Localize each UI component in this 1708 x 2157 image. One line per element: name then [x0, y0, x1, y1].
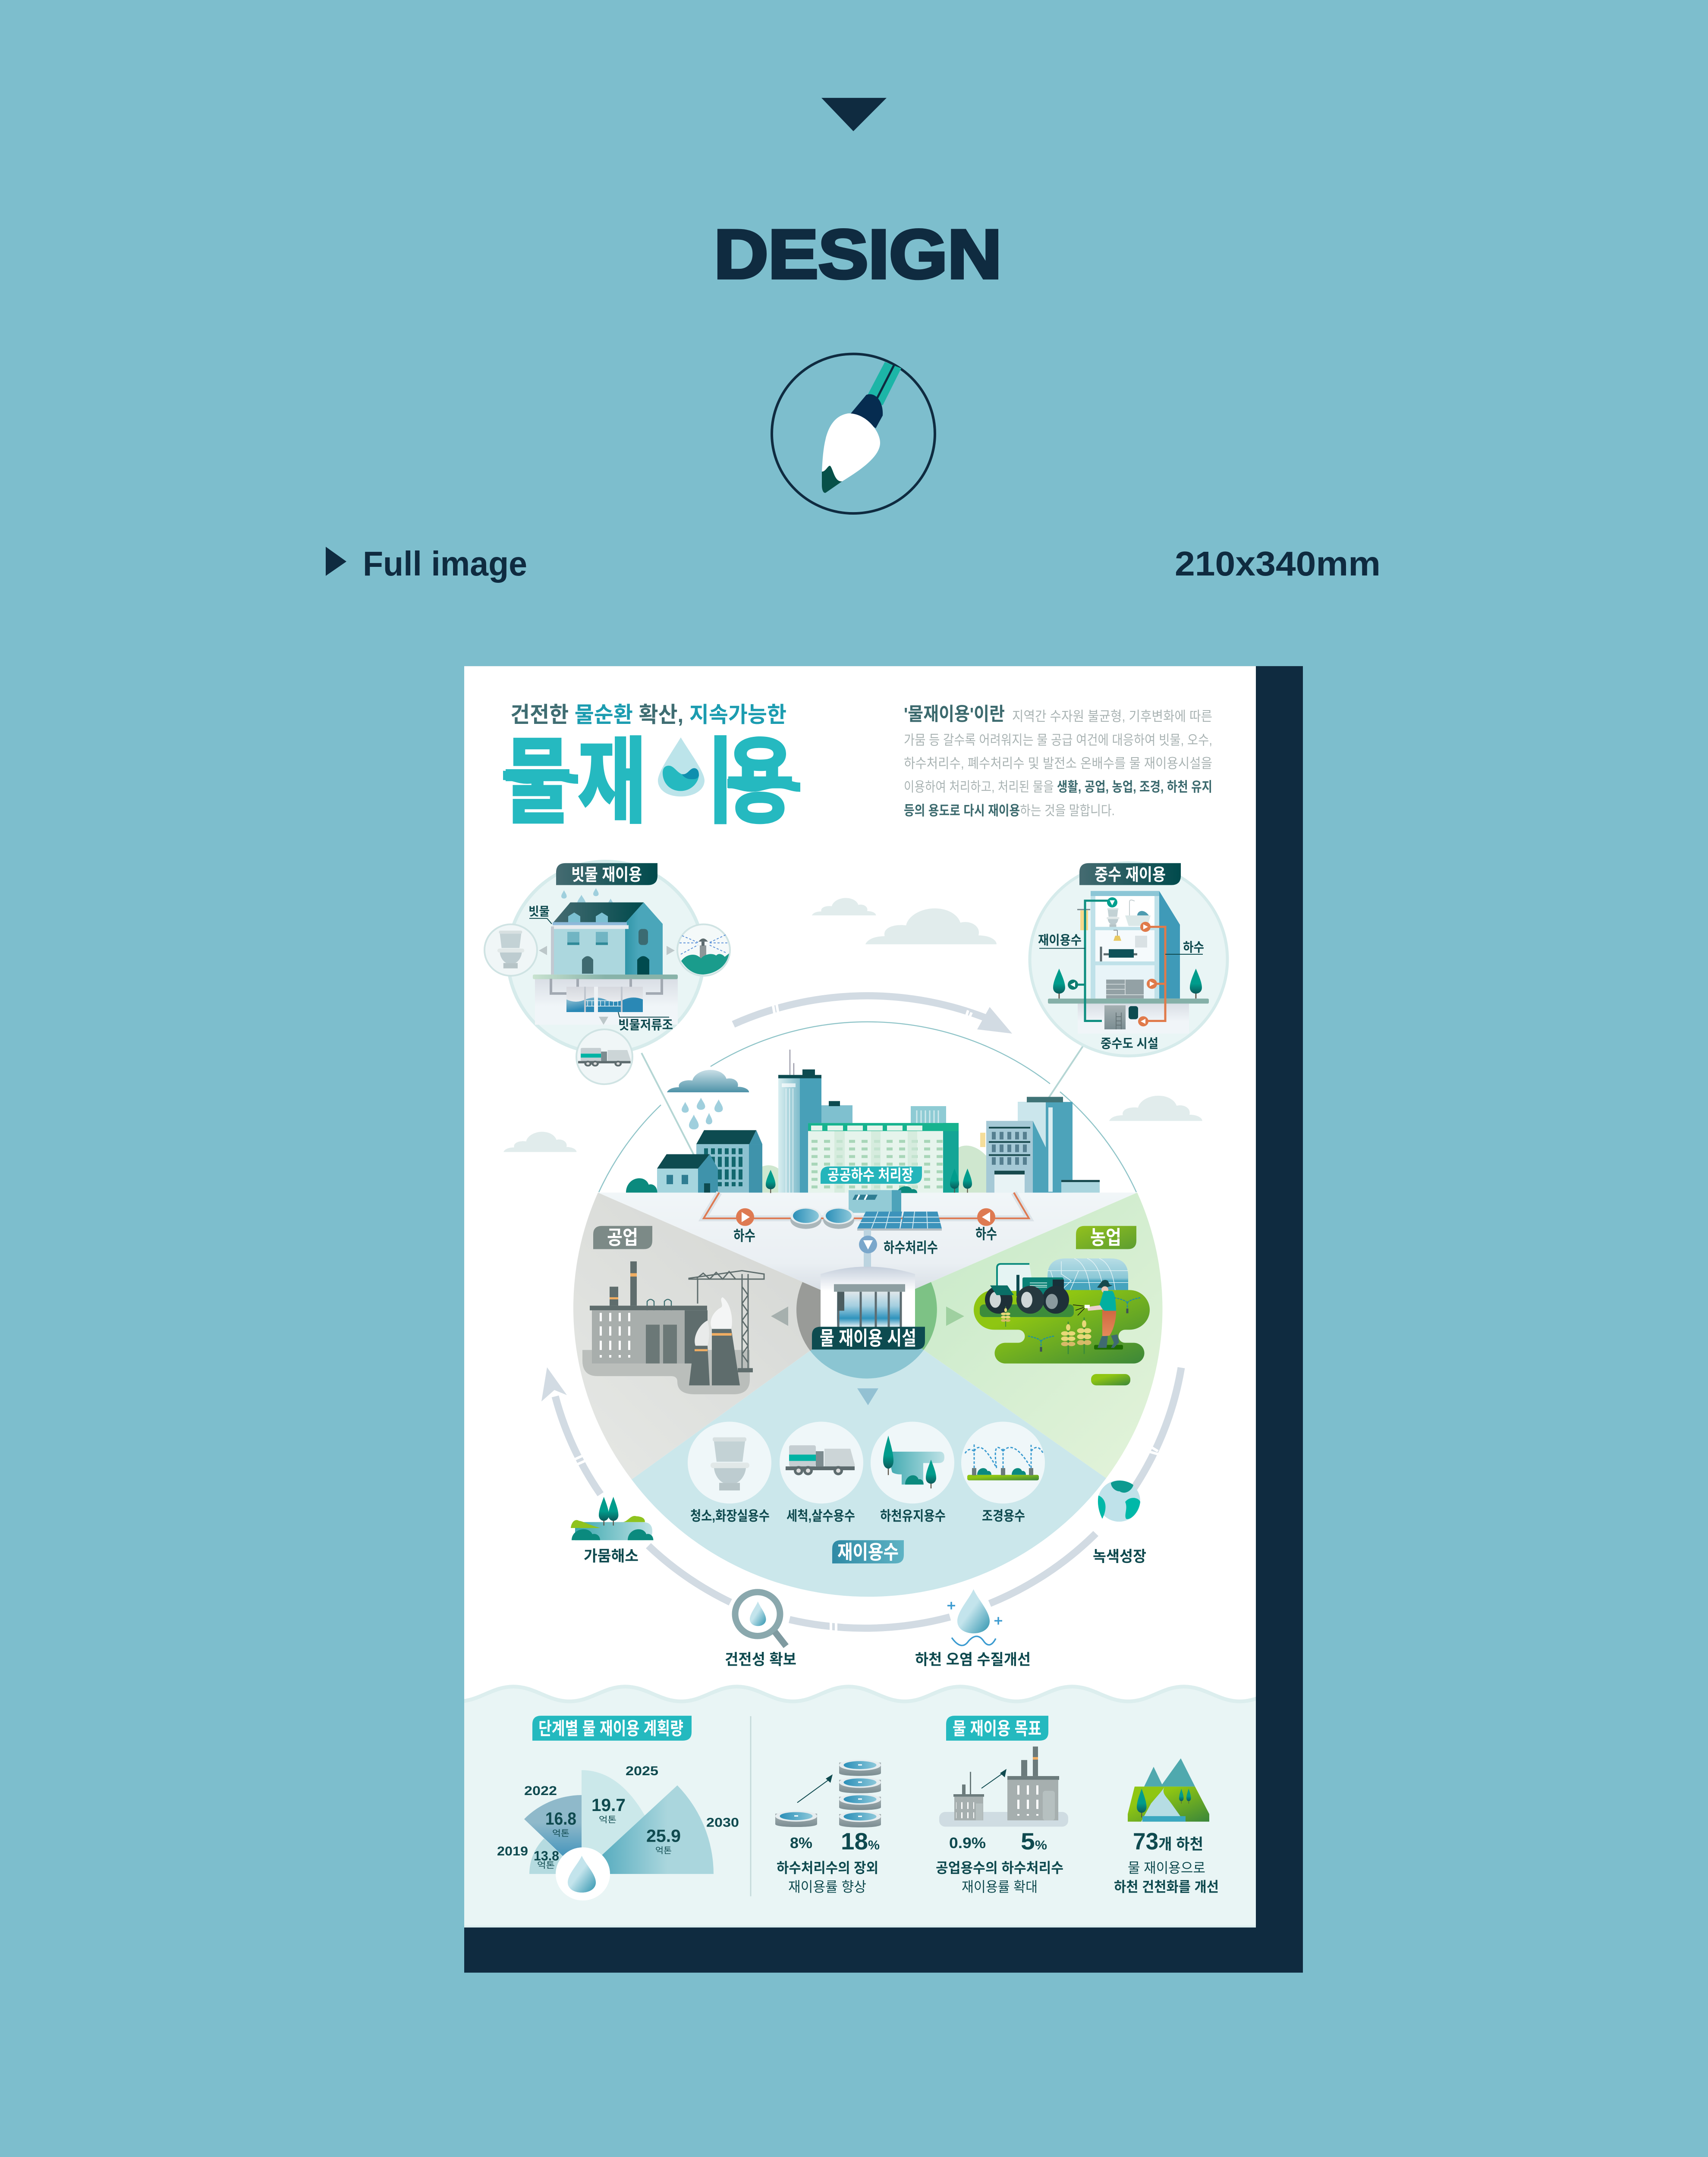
icon: river valley: [1128, 1758, 1209, 1822]
year labels: 2022: [524, 1784, 557, 1798]
item: water quality: [915, 1589, 1031, 1668]
center drop: [556, 1847, 610, 1900]
machine room: [1104, 1005, 1138, 1029]
year labels: 2019: [497, 1844, 528, 1858]
year labels: [497, 1764, 739, 1858]
left apartment buildings: [657, 1130, 762, 1193]
year labels: 2025: [626, 1764, 658, 1778]
treated water pipe and valve: [859, 1230, 877, 1268]
sewage treatment plant: [704, 1190, 1029, 1268]
ground: [533, 975, 678, 979]
small plant building: [849, 1190, 901, 1213]
city skyline: [626, 1050, 1100, 1193]
use: river maintenance: 하천유지용수: [880, 1508, 946, 1523]
definition text block: 가뭄 등 갈수록 어려워지는 물 공급 여건에 대응하여 빗물, 오수,: [904, 732, 1212, 748]
central water reuse facility: [821, 1267, 915, 1327]
definition text block: 등의 용도로 다시 재이용하는 것을 말합니다.: [904, 803, 1115, 818]
label: industry: [593, 1226, 652, 1249]
kitchen cabinets: [1106, 980, 1144, 999]
sector 2025: [582, 1770, 669, 1874]
values: 억톤: [537, 1861, 555, 1870]
icon: rain cloud: [667, 1070, 749, 1129]
year labels: 2030: [706, 1816, 739, 1830]
large apartment building: [808, 1123, 959, 1193]
label: rainwater storage: 빗물저류조: [618, 1018, 673, 1032]
arrow head: left ring: [541, 1367, 567, 1402]
land: [974, 1290, 1150, 1364]
tower crane: [689, 1270, 764, 1371]
arrow: to agriculture: [946, 1307, 964, 1326]
towel: [1080, 910, 1088, 930]
values: 억톤: [552, 1829, 569, 1838]
item: soundness: 건전성 확보: [725, 1651, 796, 1668]
label: industry: 공업: [607, 1226, 638, 1248]
label: rainwater: [528, 905, 552, 924]
item: green growth: 녹색성장: [1093, 1548, 1146, 1565]
sector 2022: [524, 1795, 582, 1874]
item: green growth: [1093, 1480, 1146, 1565]
icon: truck circle: [576, 1029, 632, 1084]
icon: sewage valve left: [736, 1208, 754, 1226]
values: 13.8: [534, 1848, 559, 1863]
icon: toilet circle: [484, 924, 537, 976]
poster sheet: [458, 666, 1296, 1927]
tractor: [985, 1264, 1069, 1314]
values: 19.7: [591, 1795, 626, 1815]
title subtitle: 건전한 물순환 확산, 지속가능한: [510, 702, 786, 727]
target: rivers: 물 재이용으로: [1128, 1860, 1205, 1876]
target: industrial water: 5%: [1021, 1828, 1047, 1855]
label: reuse water: 재이용수: [1038, 934, 1082, 947]
use: toilet and cleaning: [688, 1422, 771, 1523]
sector: reuse water: [632, 1310, 1106, 1597]
target: industrial water: [936, 1747, 1068, 1895]
sector: agriculture: [867, 1193, 1162, 1478]
values: 억톤: [599, 1815, 617, 1824]
arrows from house: [539, 946, 547, 955]
label: poster size: 210x340mm: [1175, 545, 1381, 583]
label: agriculture: 농업: [1090, 1226, 1121, 1248]
label: graywater reuse: 중수 재이용: [1095, 865, 1166, 884]
label: rainwater: 빗물: [528, 905, 550, 918]
icon: down triangle: [821, 98, 887, 131]
target: rivers: 73개 하천: [1133, 1828, 1203, 1855]
icon: factories: [939, 1747, 1068, 1827]
target: sewage reuse rate: 18%: [841, 1828, 880, 1855]
label: rainwater storage: [618, 1012, 673, 1032]
reuse water uses: [688, 1422, 1045, 1523]
house: [551, 902, 663, 975]
use: washing and spraying: [780, 1422, 863, 1523]
label: Full image: Full image: [363, 545, 527, 583]
use: landscaping: [961, 1422, 1045, 1523]
rain drops: [561, 888, 613, 906]
use: toilet and cleaning: 청소,화장실용수: [690, 1508, 770, 1523]
use: washing and spraying: 세척,살수용수: [786, 1508, 855, 1523]
item: soundness: [725, 1592, 796, 1668]
item: drought relief: [571, 1497, 653, 1565]
arrow head: top ring: [977, 1007, 1012, 1034]
farmer: [1073, 1280, 1123, 1349]
sector: industry: [573, 1193, 867, 1479]
outline of upper circle: [599, 1022, 1136, 1192]
label: rainwater reuse: 빗물 재이용: [571, 865, 642, 884]
icon: sprinkler circle: [677, 924, 730, 976]
use: landscaping: 조경용수: [982, 1508, 1025, 1523]
label: sewage right: 하수: [975, 1226, 997, 1242]
definition text block: 하수처리수, 폐수처리수 및 발전소 온배수를 물 재이용시설을: [904, 755, 1212, 771]
definition text block: '물재이용'이란: [904, 704, 1005, 725]
label: reuse water: 재이용수: [837, 1541, 899, 1563]
definition text block: 지역간 수자원 불균형, 기후변화에 따른: [1012, 709, 1212, 724]
values: 25.9: [646, 1826, 681, 1846]
treatment tanks: [790, 1207, 854, 1229]
sewage pipe: [1143, 927, 1165, 1021]
label: water reuse facility: 물 재이용 시설: [820, 1327, 916, 1349]
item: drought relief: 가뭄해소: [584, 1548, 639, 1565]
right office building: [980, 1097, 1100, 1193]
wheat: [1001, 1307, 1010, 1327]
arrow: [797, 1774, 833, 1803]
target: industrial water: 재이용률 확대: [962, 1879, 1038, 1895]
clouds: [503, 898, 1202, 1152]
target: industrial water: 공업용수의 하수처리수: [936, 1860, 1063, 1876]
trees: [1053, 968, 1065, 999]
illustration: factory: [582, 1261, 764, 1394]
label: planned reuse: [532, 1716, 692, 1741]
label: planned reuse: 단계별 물 재이용 계획량: [538, 1719, 683, 1739]
divider: [750, 1716, 752, 1896]
panel: bottom statistics: [458, 1687, 1296, 1927]
main title: 물재이용: [503, 729, 795, 835]
target: sewage reuse rate: 재이용률 향상: [788, 1879, 866, 1895]
label: sewage: [1165, 940, 1204, 955]
ground: [1048, 999, 1209, 1003]
sector 2030: [582, 1785, 714, 1874]
values: 16.8: [545, 1808, 576, 1828]
label: reuse target: 물 재이용 목표: [953, 1719, 1041, 1739]
living room items: [1114, 930, 1117, 936]
target: sewage reuse rate: 8%: [790, 1835, 812, 1852]
solar panels: [857, 1212, 942, 1231]
label: sewage left: 하수: [733, 1228, 755, 1244]
panel: graywater reuse: [1030, 863, 1227, 1056]
item: water quality: 하천 오염 수질개선: [915, 1651, 1031, 1668]
outer ring arrows: [555, 996, 1181, 1628]
pipe valves: [1068, 897, 1157, 1026]
panel: rainwater reuse: [484, 862, 730, 1084]
tall tower: [778, 1050, 821, 1193]
heading: DESIGN: DESIGN: [714, 216, 1002, 293]
central hub: [796, 1282, 937, 1378]
rainwater storage tank: [551, 979, 662, 1012]
illustration: farm: [974, 1258, 1150, 1385]
arrow: [981, 1769, 1007, 1788]
sector 2019: [529, 1839, 582, 1874]
target: sewage reuse rate: 하수처리수의 장외: [777, 1860, 878, 1876]
label: graywater facility: 중수도 시설: [1101, 1037, 1158, 1051]
building cutaway: [1077, 891, 1180, 999]
icon: sewage valve right: [977, 1208, 995, 1226]
greenhouse: [1047, 1258, 1128, 1291]
bushes and trees: [626, 1169, 972, 1193]
label: treated water: 하수처리수: [884, 1240, 938, 1256]
use: river maintenance: [871, 1422, 954, 1523]
target: sewage reuse rate: [775, 1760, 881, 1895]
poster shadow block: [464, 666, 1303, 1973]
label: public sewage plant: 공공하수 처리장: [827, 1167, 913, 1184]
icon: stacked tanks: [775, 1760, 881, 1827]
thin leader lines: [642, 1046, 1083, 1158]
arrow: to industry: [771, 1307, 788, 1326]
arrow: to reuse water: [857, 1388, 878, 1405]
label: reuse target: [946, 1716, 1048, 1741]
target: rivers: 하천 건천화를 개선: [1114, 1879, 1219, 1895]
label: sewage: 하수: [1183, 940, 1204, 955]
target: industrial water: 0.9%: [949, 1835, 986, 1852]
chart: main water reuse circle: [573, 1022, 1162, 1597]
label: agriculture: [1076, 1226, 1136, 1249]
icon: title water drop: [658, 737, 705, 796]
values: 억톤: [655, 1846, 672, 1855]
definition text block: [904, 704, 1212, 818]
target: rivers: [1114, 1758, 1219, 1895]
chart: planned reuse rose: [497, 1764, 739, 1900]
green pill: [1091, 1374, 1130, 1385]
values: [534, 1795, 681, 1870]
bathroom items: [1107, 908, 1120, 927]
definition text block: 이용하여 처리하고, 처리된 물을 생활, 공업, 농업, 조경, 하천 유지: [904, 779, 1212, 794]
reuse water pipe: [1074, 901, 1108, 1021]
icon: paint brush in circle: [772, 354, 935, 513]
sprouts: [1028, 1336, 1054, 1352]
sector: sewage treatment: [598, 1193, 1137, 1310]
